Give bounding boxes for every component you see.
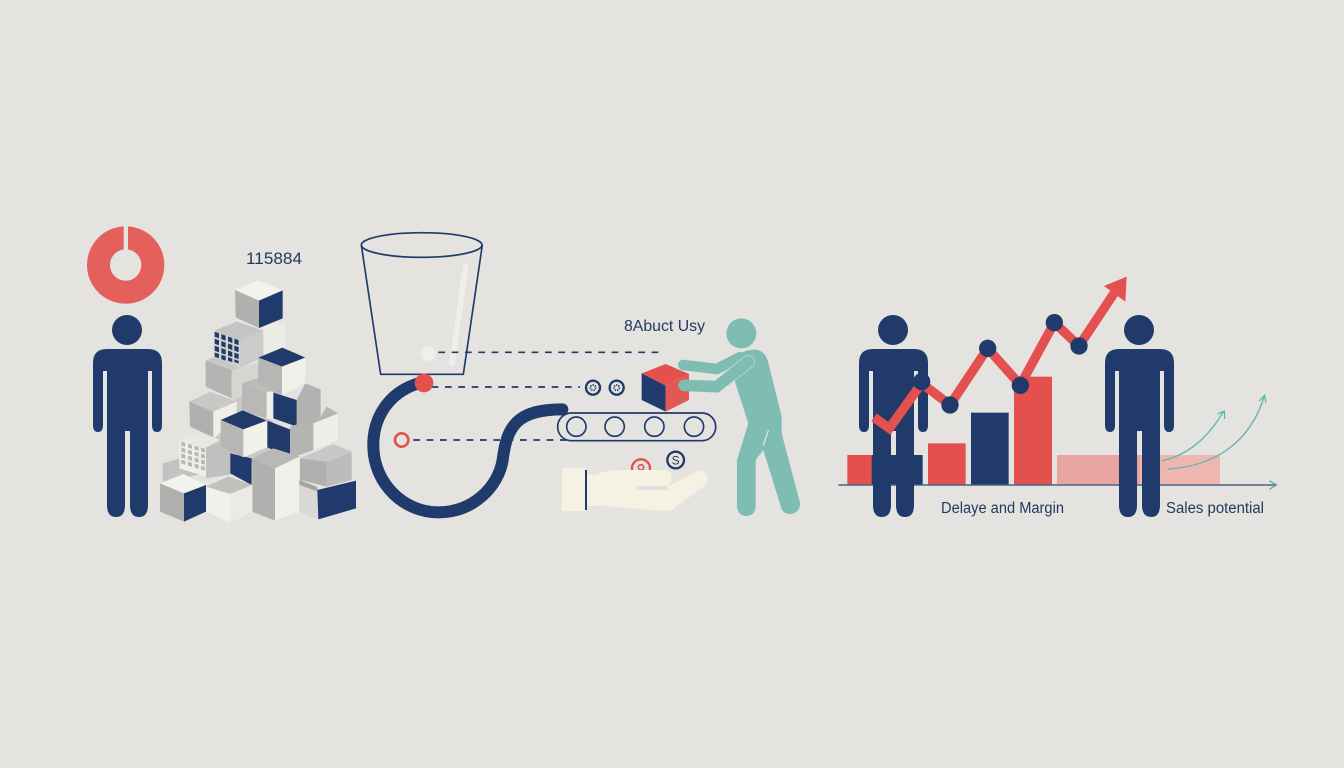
teal worker: [642, 318, 800, 516]
cup highlight: [452, 267, 466, 363]
stacked cubes pile: [160, 280, 356, 523]
navy grid on cube: [215, 332, 239, 365]
dashed connectors: [413, 352, 663, 440]
bars: [847, 377, 1220, 484]
chart label: sales potential: Sales potential: [1166, 500, 1264, 517]
bar chart with trend line: [838, 377, 1277, 489]
red node: [415, 374, 433, 392]
red box: [642, 364, 689, 412]
small coins: [586, 381, 624, 395]
curved tube: [373, 383, 562, 512]
teal growth arrows: [1162, 395, 1266, 469]
person: right figure: [1105, 315, 1174, 517]
chart label: delay and margin: Delaye and Margin: [941, 500, 1064, 517]
dollar coin: [667, 452, 684, 468]
trend line with arrow: [874, 277, 1127, 428]
label: about: 8Abuct Usy: [624, 318, 705, 335]
red coin: [632, 459, 650, 477]
conveyor belt: [558, 413, 716, 441]
process diagram: funnel cup, tube and conveyor: [361, 233, 800, 516]
hand: [562, 468, 708, 511]
person: middle figure: [859, 315, 928, 517]
pale ball: [421, 347, 436, 361]
light grid on cube: [181, 442, 205, 471]
person: left figure: [93, 315, 162, 517]
red ring node: [395, 433, 408, 447]
axis arrow: [838, 481, 1277, 489]
dollar coin: S: [672, 453, 680, 467]
number label: 115884: [246, 250, 302, 268]
glass cup: [361, 233, 482, 374]
icon: red donut: [98, 225, 153, 292]
